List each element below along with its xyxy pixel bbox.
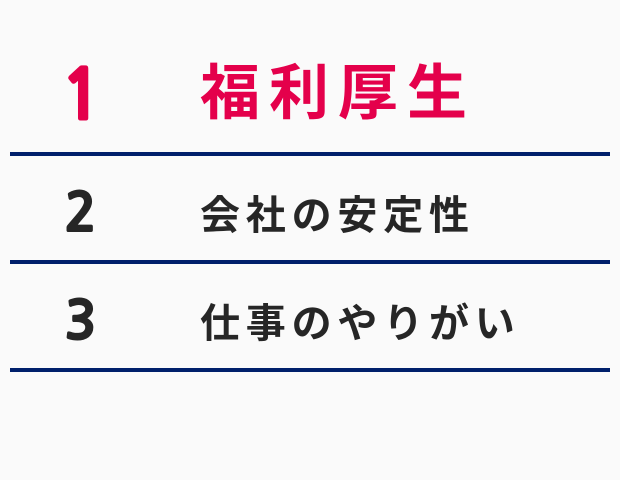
ranking row 3 (10, 291, 610, 372)
rank number 1: 1 (61, 63, 102, 130)
rank number 3: 3 (64, 294, 97, 346)
divider 3 (10, 368, 610, 372)
rank number 2: 2 (64, 186, 97, 238)
label: 会社の安定性: 会社の安定性 (200, 183, 475, 241)
label: 仕事のやりがい: 仕事のやりがい (200, 291, 521, 349)
ranking row 2 (10, 183, 610, 264)
label: 福利厚生: 福利厚生 (200, 45, 476, 132)
divider 1 (10, 152, 610, 156)
divider 2 (10, 260, 610, 264)
ranking row 1 (10, 45, 610, 156)
